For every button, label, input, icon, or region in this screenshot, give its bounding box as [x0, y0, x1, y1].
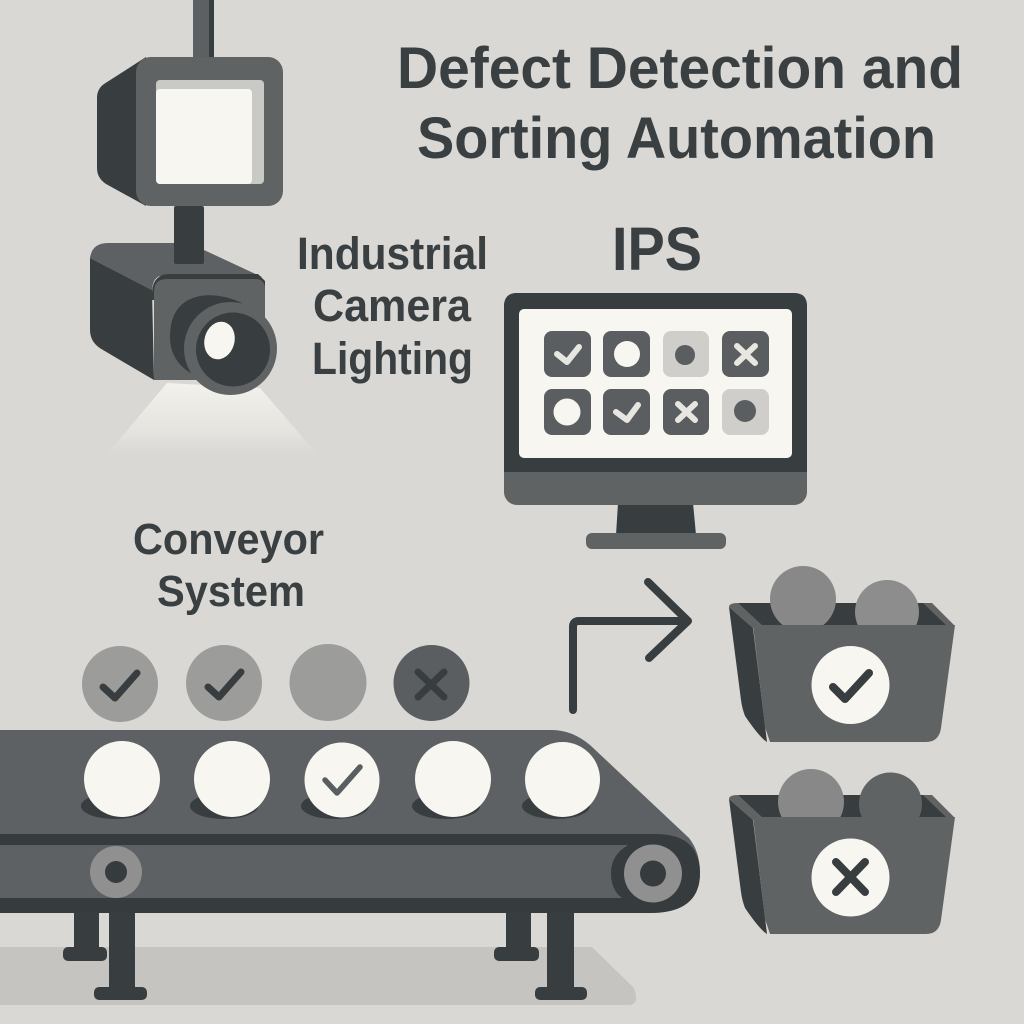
status tile: circle: [544, 389, 591, 435]
monitor: [504, 293, 807, 549]
inspection status row: [82, 644, 470, 722]
item shadows: [81, 793, 590, 819]
belt: [0, 730, 700, 913]
label: conveyor system: [133, 515, 324, 616]
status: pending: [290, 644, 366, 721]
title: Sorting Automation: [417, 106, 936, 171]
status: pass: [82, 646, 158, 722]
label: industrial camera lighting: Camera: [313, 280, 472, 331]
status tile: cross: [663, 389, 709, 435]
conveyor system: [0, 730, 700, 1000]
status tile: check: [544, 331, 591, 377]
left roller: [90, 846, 142, 898]
check on item: [325, 767, 360, 793]
status tile: circle: [603, 331, 650, 377]
bin: rejected: [729, 769, 955, 934]
status: pass: [186, 645, 262, 721]
status tile: check: [603, 389, 650, 435]
items on belt: [84, 741, 600, 818]
arrow: sorting route: [573, 582, 688, 710]
label: industrial camera lighting: [297, 228, 488, 384]
label: conveyor system: System: [157, 567, 305, 616]
floor shadow: [0, 947, 636, 1005]
legs: [63, 905, 587, 1000]
label: conveyor system: Conveyor: [133, 515, 324, 564]
status tile: dot: [663, 331, 709, 377]
bin: accepted: [729, 566, 955, 742]
status tile: dot: [722, 389, 769, 435]
light beam: [102, 383, 324, 462]
right roller: [624, 844, 682, 902]
label: industrial camera lighting: Lighting: [312, 333, 473, 384]
label: IPS: IPS: [612, 215, 702, 283]
title: Defect Detection and: [397, 36, 963, 101]
status tile: cross: [722, 331, 769, 377]
icon: lighting unit: [97, 0, 283, 206]
status: reject: [394, 645, 470, 721]
label: industrial camera lighting: Industrial: [297, 228, 488, 279]
icon: industrial camera: [90, 206, 277, 395]
title: [397, 36, 963, 171]
